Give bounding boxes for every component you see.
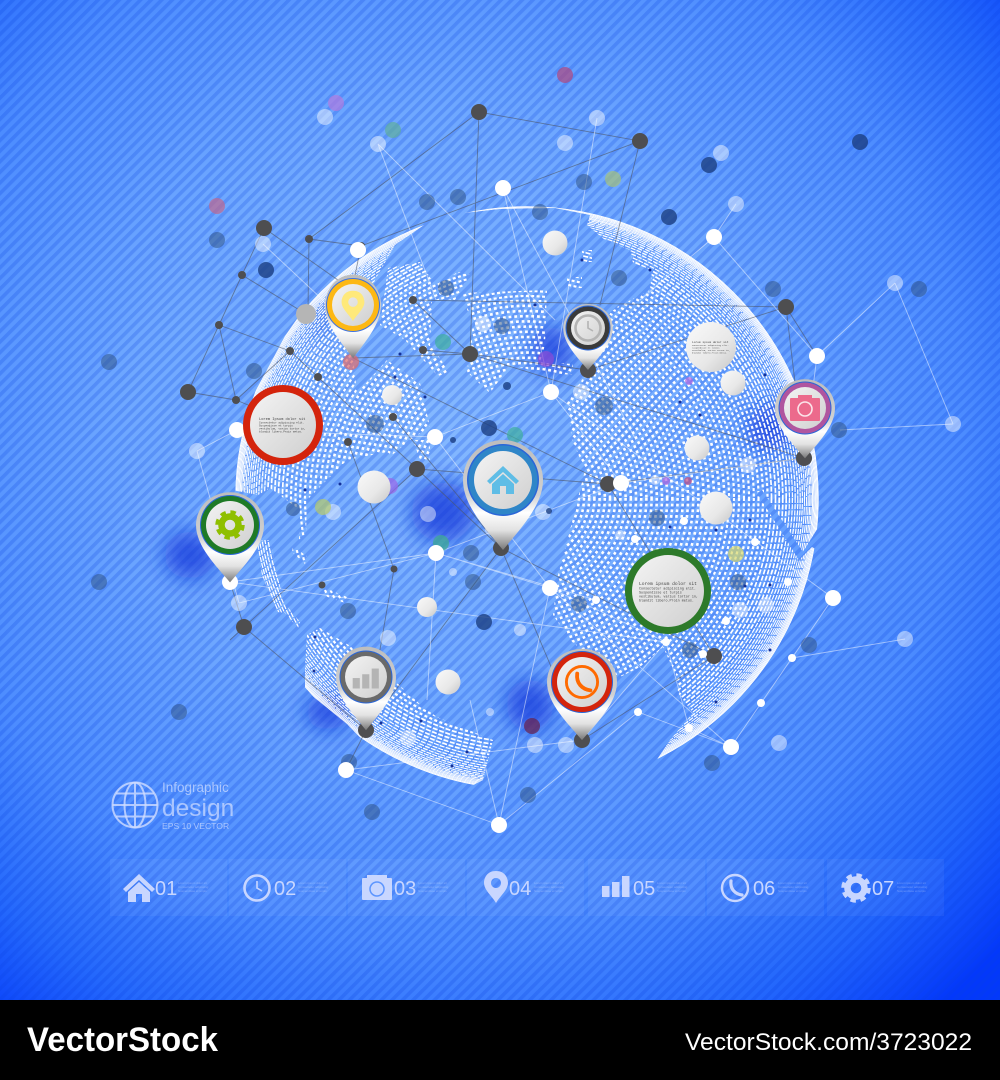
pin: location, yellow (325, 275, 381, 358)
title text (162, 780, 234, 831)
dark blue nodes (258, 134, 868, 630)
tab captions: Suspendisse et turpis (298, 889, 327, 893)
coloured nodes (209, 67, 744, 734)
pin: settings, green (196, 492, 264, 582)
tab captions: Suspendisse et turpis (778, 889, 807, 893)
white circle text: blandit libero.Proin metus. (692, 351, 727, 354)
green circle text: Lorem ipsum dolor sit (639, 581, 697, 587)
tab captions: Consectetur adipiscing (534, 885, 565, 889)
tab captions: Suspendisse et turpis (178, 889, 207, 893)
tab backgrounds (110, 859, 944, 916)
tab captions: Consectetur adipiscing (298, 885, 329, 889)
green circle text: Suspendisse et turpis (639, 590, 682, 596)
tab captions: Lorem ipsum dolor sit (778, 881, 807, 885)
tab strip: 01 to 07 (110, 859, 944, 916)
tab captions: Suspendisse et turpis (534, 889, 563, 893)
tab captions: Suspendisse et turpis (657, 889, 686, 893)
text circle: plain white (686, 322, 736, 372)
pin: phone, red (547, 649, 617, 740)
tab captions (178, 881, 928, 893)
tab numbers: 01 (155, 878, 177, 900)
footer bar (0, 1000, 1000, 1080)
camera icon (790, 395, 820, 421)
tab captions: Lorem ipsum dolor sit (298, 881, 327, 885)
dotted world map globe (236, 207, 818, 789)
tab captions: Consectetur adipiscing (657, 885, 688, 889)
red circle text: Suspendisse et turpis (259, 424, 293, 428)
tab captions: Lorem ipsum dolor sit (897, 881, 926, 885)
title text: Infographic (162, 780, 229, 795)
white circle text: Consectetur adipiscing elit. (692, 344, 729, 347)
red circle text: Lorem Ipsum dolor sit (259, 417, 305, 422)
footer brand: VectorStock (27, 1021, 218, 1059)
red circle text: Consectetur adipiscing elit. (259, 420, 304, 424)
tab numbers: 03 (394, 878, 416, 900)
tab captions: Consectetur adipiscing (418, 885, 449, 889)
tab numbers: 06 (753, 878, 775, 900)
tab captions: Lorem ipsum dolor sit (534, 881, 563, 885)
icon: globe (112, 782, 158, 828)
small navy map dots (304, 258, 772, 768)
dark network nodes (180, 104, 812, 748)
tab captions: Consectetur adipiscing (897, 885, 928, 889)
pin drop shadows (164, 298, 792, 731)
tab captions: Suspendisse et turpis (418, 889, 447, 893)
tab numbers: 02 (274, 878, 296, 900)
translucent light nodes (189, 109, 961, 753)
white circle text: vestibulum, varius tortor in, (692, 349, 730, 352)
tab captions: Lorem ipsum dolor sit (418, 881, 447, 885)
tab numbers: 07 (872, 878, 894, 900)
tab icons (123, 871, 868, 903)
title text: EPS 10 VECTOR (162, 821, 229, 831)
logo: globe icon and title (112, 780, 234, 831)
translucent dark nodes (91, 174, 927, 820)
white spheres (296, 230, 746, 694)
green circle text: vestibulum, varius tortor in, (639, 594, 698, 600)
network lines: dark (188, 112, 817, 770)
tab captions: Consectetur adipiscing (178, 885, 209, 889)
tab captions: Lorem ipsum dolor sit (178, 881, 207, 885)
pin: clock, dark (563, 304, 613, 370)
green circle text: blandit libero.Proin metus. (639, 598, 694, 604)
tab numbers: 05 (633, 878, 655, 900)
white circle text: Lorem ipsum dolor sit (692, 340, 729, 344)
text circle: red (243, 385, 323, 465)
pin: bar chart, gray (336, 647, 396, 730)
title text: design (162, 795, 234, 822)
white circle text: Suspendisse et turpis (692, 346, 720, 349)
network lines: white (197, 118, 953, 825)
tab numbers (155, 878, 894, 900)
green circle text: Consectetur adipiscing elit. (639, 586, 696, 592)
footer image id: VectorStock.com/3723022 (685, 1029, 972, 1056)
tab captions: Lorem ipsum dolor sit (657, 881, 686, 885)
tab captions: Suspendisse et turpis (897, 889, 926, 893)
pin: camera, magenta (775, 379, 835, 458)
pin: home, blue (463, 440, 543, 550)
text circle: green (625, 548, 711, 634)
tab captions: Consectetur adipiscing (778, 885, 809, 889)
white network nodes (222, 180, 841, 833)
tab numbers: 04 (509, 878, 531, 900)
red circle text: blandit libero.Proin metus. (259, 430, 303, 434)
red circle text: vestibulum, varius tortor in, (259, 426, 306, 430)
